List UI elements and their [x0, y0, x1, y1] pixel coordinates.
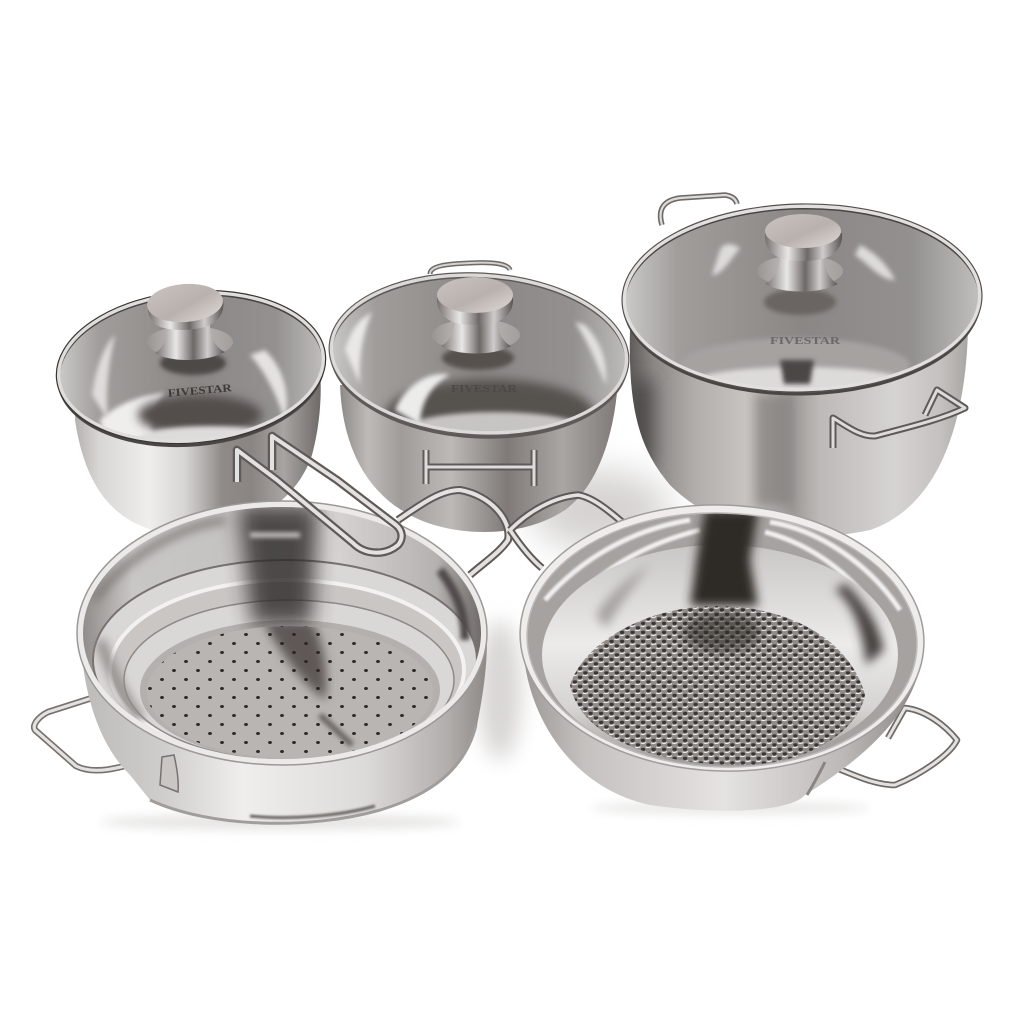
steamer base ring — [150, 725, 476, 823]
steamer outer body — [80, 640, 487, 822]
pan interior — [520, 505, 925, 775]
back handle of stock pot — [661, 195, 737, 225]
pan rim — [515, 498, 929, 778]
brand mark on middle lid: FIVESTAR — [451, 383, 518, 395]
back handle of middle pot — [430, 263, 510, 274]
steamer handle bracket — [160, 755, 178, 792]
body of left pot — [75, 370, 321, 534]
steamer insert — [34, 500, 487, 823]
brand mark on left lid: FIVESTAR — [167, 382, 233, 400]
body of middle pot — [340, 380, 618, 532]
floor shadows — [100, 470, 870, 830]
lid of left pot — [56, 290, 326, 448]
perforated steamer floor — [148, 626, 428, 753]
pan handle bracket — [807, 762, 825, 795]
pan lip highlight — [523, 506, 921, 774]
brand mark on stock pot lid: FIVESTAR — [770, 335, 841, 347]
pan outer body — [525, 660, 922, 811]
steamer interior — [80, 500, 485, 765]
steamer ridges — [93, 560, 477, 760]
dimpled pan floor — [570, 606, 865, 765]
knob of stock lid — [757, 214, 843, 292]
body of stock pot — [630, 330, 968, 536]
side handle of stock pot — [833, 390, 965, 448]
long handle of left pot — [237, 436, 402, 553]
pot 2: middle saucepan — [325, 263, 635, 532]
frying pan — [515, 498, 957, 811]
front handle of middle pot — [426, 450, 534, 486]
pot 1: left saucepan — [50, 280, 332, 534]
knob of left lid — [146, 281, 233, 360]
pot 3: right stock pot — [620, 195, 985, 536]
steamer left handle — [34, 697, 165, 770]
back handle of pan — [510, 495, 622, 568]
knob of middle lid — [432, 277, 520, 354]
back handle of steamer — [398, 490, 508, 575]
pan right handle — [825, 708, 957, 785]
cookware photo illustration — [30, 192, 983, 832]
steamer rim — [77, 501, 487, 765]
lid of middle pot — [328, 272, 630, 439]
lid of stock pot — [620, 200, 985, 400]
